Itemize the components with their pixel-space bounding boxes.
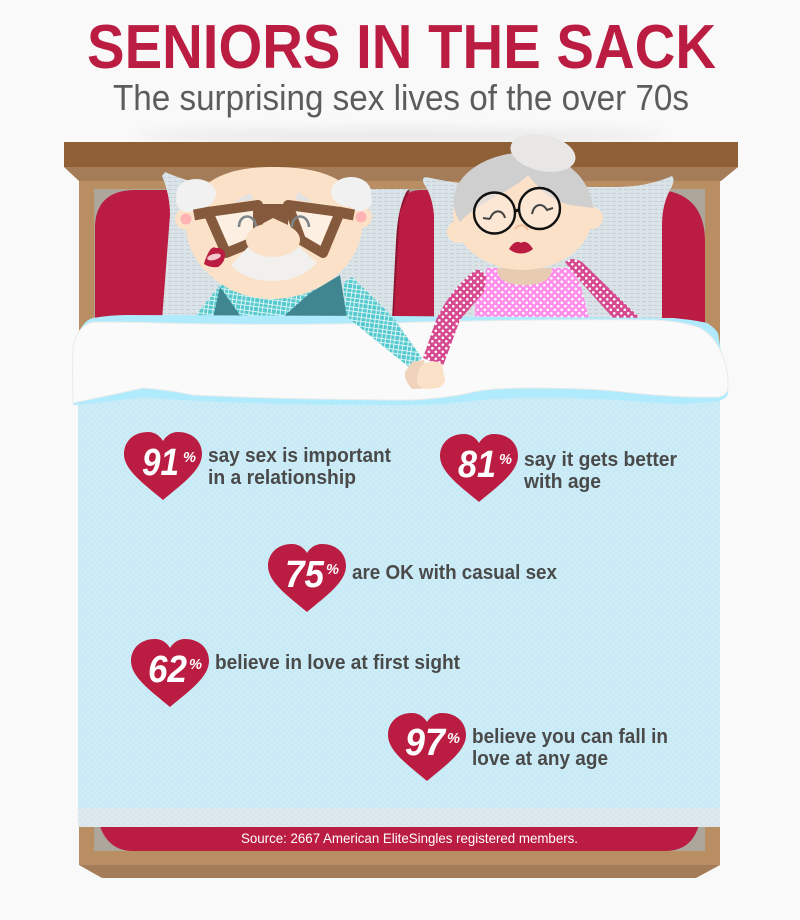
man nose	[246, 223, 300, 257]
label: believe in love at first sight	[215, 652, 460, 674]
woman closed eyes	[483, 205, 553, 219]
bed	[64, 130, 738, 878]
label: say sex is important	[208, 445, 391, 467]
man glasses	[194, 204, 354, 253]
label: in a relationship	[208, 467, 356, 489]
label: love at any age	[472, 748, 608, 770]
bed foot board	[79, 865, 720, 878]
man vest right	[282, 275, 347, 318]
value: 81	[458, 444, 496, 486]
woman ears	[447, 221, 469, 243]
blanket overhang strip	[78, 808, 720, 827]
man ears	[175, 208, 197, 230]
blanket body	[78, 385, 720, 808]
value: 62	[148, 649, 187, 691]
man	[175, 167, 372, 318]
value: 97	[405, 722, 447, 764]
percent sign: %	[499, 451, 512, 468]
pillow left	[162, 172, 408, 320]
cushion bottom	[98, 820, 700, 851]
pillow right	[423, 176, 674, 320]
heart	[124, 432, 202, 500]
percent sign: %	[183, 449, 196, 466]
woman left sleeve	[423, 270, 486, 366]
woman lips	[509, 242, 533, 254]
title: SENIORS IN THE SACK	[87, 13, 716, 82]
held hands	[405, 360, 445, 389]
man closed eyes	[239, 216, 309, 227]
value: 75	[285, 554, 325, 596]
stat: 91%	[124, 432, 391, 500]
woman face	[453, 158, 593, 270]
percent sign: %	[189, 656, 202, 673]
man sleeve	[343, 277, 422, 368]
mattress recess	[94, 189, 705, 851]
man moustache	[231, 247, 317, 281]
stat: 62%	[131, 639, 460, 707]
percent sign: %	[326, 561, 339, 578]
label: are OK with casual sex	[352, 562, 557, 584]
source note: Source: 2667 American EliteSingles registered members.	[241, 830, 578, 846]
bed frame	[79, 175, 720, 865]
man vest left	[213, 287, 242, 318]
white sheet	[72, 320, 728, 403]
heart	[440, 434, 518, 502]
man cheeks	[180, 214, 192, 224]
man eyebrows	[233, 192, 313, 202]
cushion middle	[390, 190, 440, 330]
man shirt	[194, 285, 350, 318]
woman	[447, 129, 640, 318]
woman nose	[515, 225, 528, 230]
heart	[388, 713, 466, 781]
cushion right	[655, 190, 705, 330]
label	[472, 726, 668, 770]
man hair	[176, 177, 372, 212]
stat: 81%	[440, 434, 677, 502]
woman hair	[454, 153, 593, 222]
stat: 75%	[268, 544, 557, 612]
cushion left	[95, 190, 180, 330]
woman dress	[475, 268, 589, 318]
woman right sleeve	[565, 259, 640, 318]
man head	[186, 167, 362, 299]
heart	[131, 639, 209, 707]
woman glasses	[474, 188, 560, 234]
label: believe you can fall in	[472, 726, 668, 748]
lipstick kiss	[204, 247, 225, 267]
woman neck	[497, 268, 552, 285]
value: 91	[142, 442, 179, 484]
label: say it gets better	[524, 449, 677, 471]
blanket blue fold	[73, 315, 728, 405]
percent sign: %	[447, 730, 460, 747]
stat: 97%	[388, 713, 668, 781]
subtitle: The surprising sex lives of the over 70s	[113, 77, 689, 118]
headboard lower band	[64, 167, 738, 181]
woman bun	[507, 129, 579, 177]
label	[523, 449, 677, 493]
label: with age	[523, 471, 601, 493]
headboard top	[64, 142, 738, 167]
label	[208, 445, 391, 489]
heart	[268, 544, 346, 612]
